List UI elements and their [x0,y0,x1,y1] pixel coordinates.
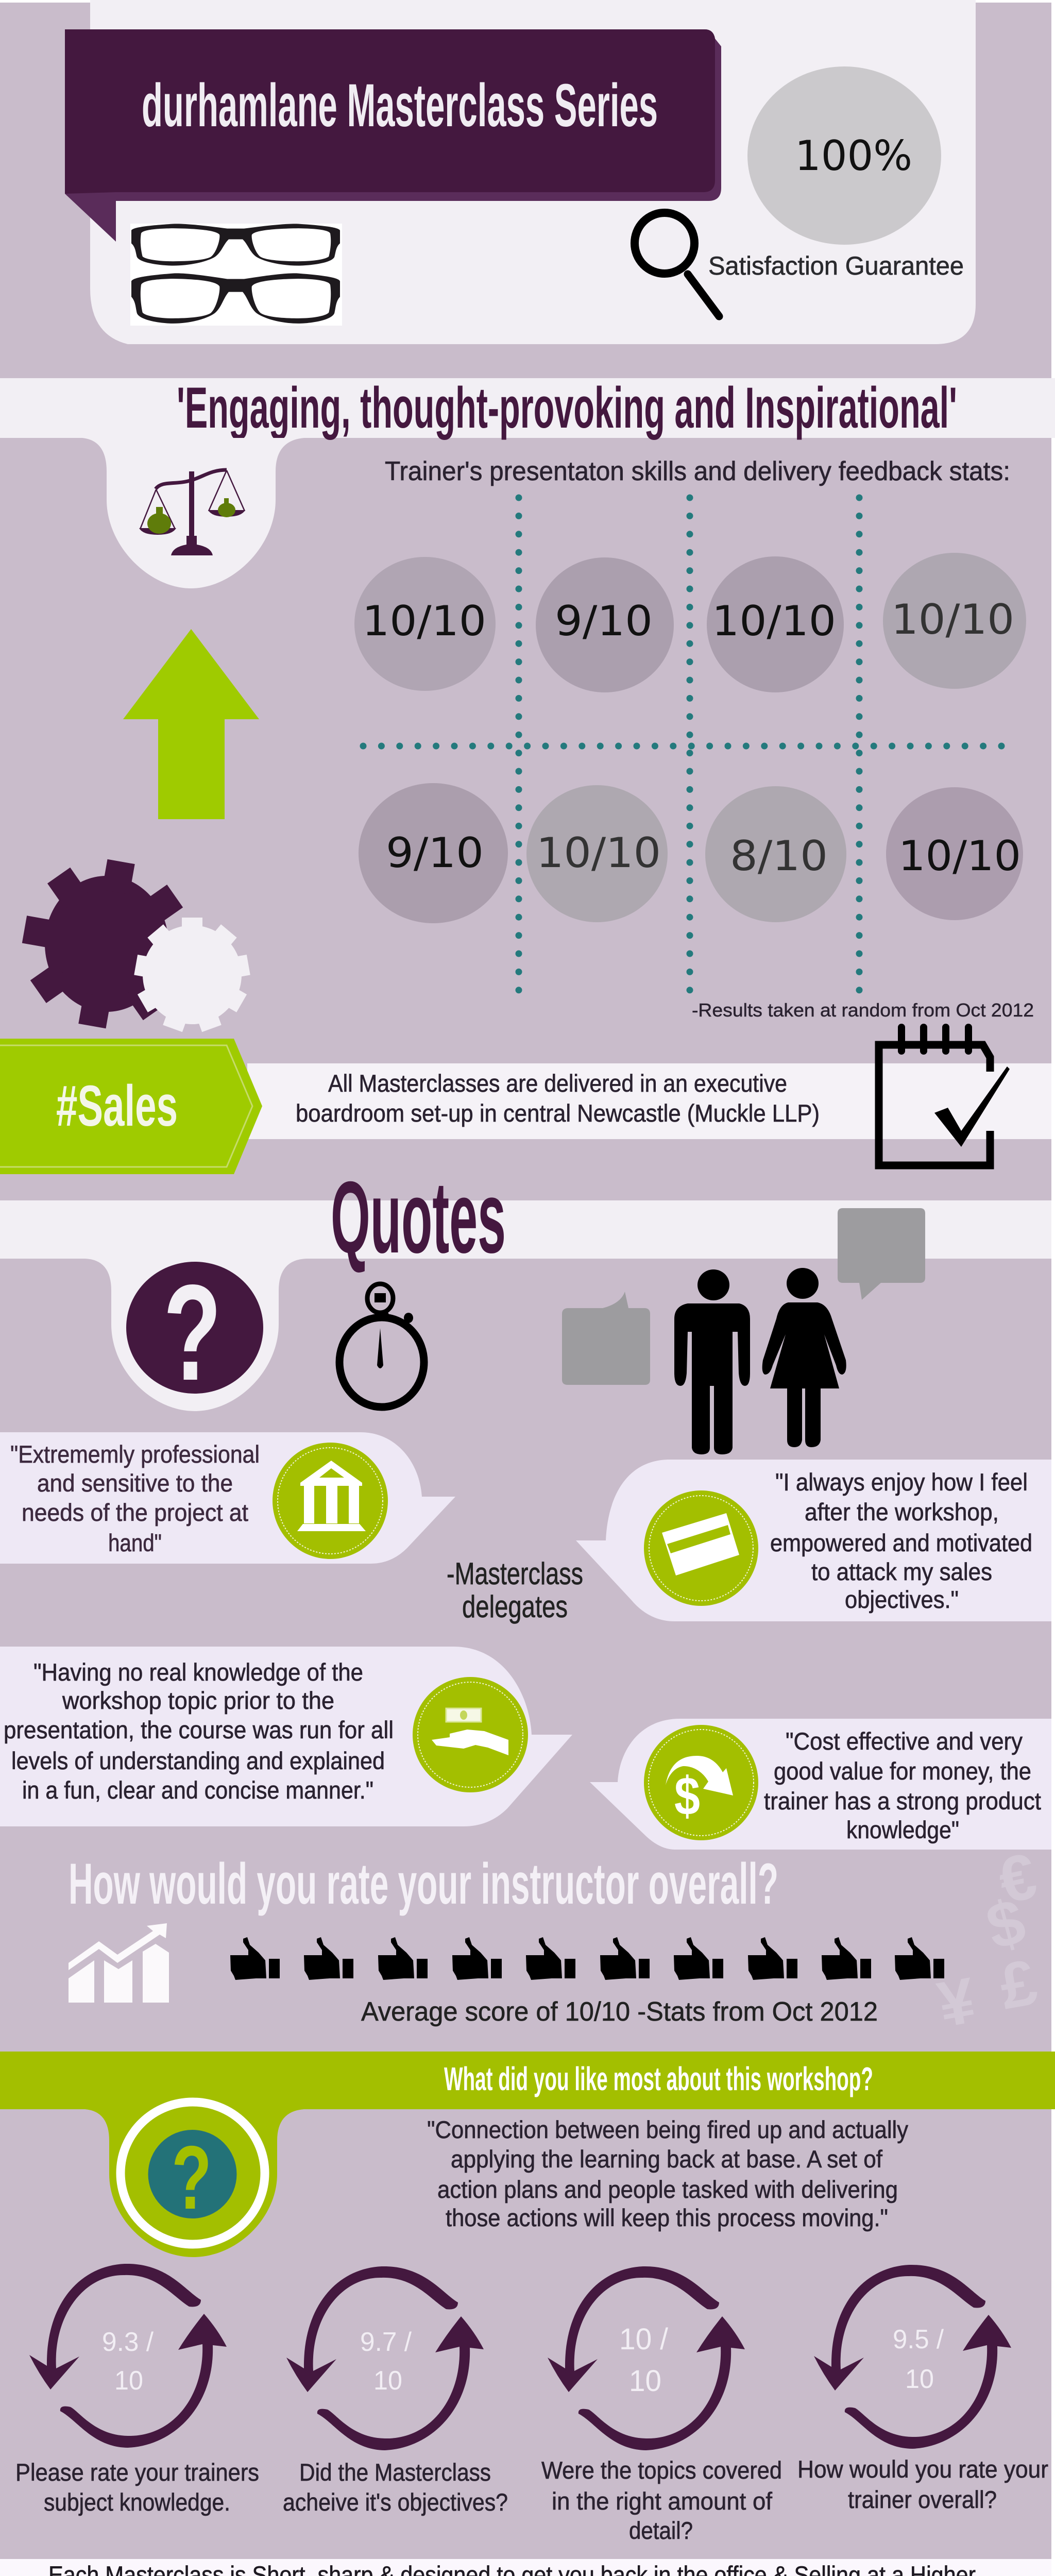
cycle score 2 [286,2266,484,2450]
currency watermark: ¥ [933,1964,980,2041]
survey question 3 [541,2456,782,2544]
quote attribution: delegates [462,1589,568,1624]
survey question 2 [283,2459,508,2516]
cycle score 4: 9.5 / [893,2325,944,2354]
quote text 3: workshop topic prior to the [62,1687,334,1714]
cycle score 1: 9.3 / [102,2327,154,2357]
quote text 2: objectives." [845,1586,959,1613]
quote text 3 [4,1658,394,1804]
icon: man [674,1269,750,1454]
icon: woman [762,1268,846,1447]
ribbon: #Sales: #Sales [56,1074,178,1138]
title: durhamlane Masterclass Series [142,72,658,140]
delivery text [296,1070,820,1127]
cycle score 3: 10 / [619,2323,669,2356]
icon: green up arrow [123,629,259,819]
cycle score 1 [29,2264,227,2448]
score 6: 10/10 [536,829,661,877]
band: delivery [247,1063,1051,1139]
score 1: 10/10 [362,597,486,645]
band: quotes: Quotes [331,1160,506,1274]
quote text 3: presentation, the course was run for all [4,1716,394,1743]
quote text 2: "I always enjoy how I feel [775,1468,1028,1496]
cycle score 4: 10 [905,2364,934,2394]
currency watermark: € [993,1840,1043,1917]
cycle score 3 [548,2266,745,2450]
score 6 [526,785,668,922]
chart: score circles [354,553,1026,923]
icon: growth chart [69,1923,169,2003]
workshop quote text: applying the learning back at base. A set of [451,2145,883,2173]
satisfaction guarantee label: Satisfaction Guarantee [708,251,964,280]
survey question 1: subject knowledge. [44,2488,230,2516]
cycle score 4 [814,2265,1011,2449]
quote text 2: after the workshop, [805,1498,999,1526]
score 4 [883,553,1026,689]
title banner [65,29,721,242]
icon: question mark: ? [163,1257,222,1409]
quote text 2 [770,1468,1032,1613]
icon: small glasses [130,224,342,326]
icon: speech bubble right [838,1208,925,1300]
currency watermark: $ [979,1885,1032,1963]
satisfaction badge: 100% [795,132,912,180]
icon: temple [273,1443,388,1559]
icon: notepad with tick [879,1027,1010,1165]
cycle score 2: 9.7 / [360,2327,412,2357]
quote bubble 3 [0,1647,572,1826]
workshop quote text: those actions will keep this process moving." [446,2204,888,2231]
band: closing statement [0,2559,1051,2576]
workshop quote text: action plans and people tasked with delivering [437,2176,898,2203]
icon: magnifying glass [635,213,719,316]
score 7 [705,786,846,922]
panel: question bubble [85,1257,307,1411]
icon: teal question mark [148,2128,237,2228]
band: engaging heading [0,376,1055,440]
panel: green question bubble [85,2102,304,2257]
survey question 3: Were the topics covered [541,2456,782,2484]
currency watermark: £ [995,1946,1042,2023]
dotted grid [363,498,1002,992]
survey question 3: in the right amount of [552,2487,773,2515]
quote text 4: good value for money, the [774,1757,1031,1785]
icon: gears [22,859,250,1032]
satisfaction badge [747,66,941,245]
quote text 1: and sensitive to the [37,1469,233,1497]
quote text 3: in a fun, clear and concise manner." [22,1776,373,1804]
quote text 3: "Having no real knowledge of the [33,1658,363,1686]
icon: speech bubble left [562,1292,650,1385]
score 8: 10/10 [898,832,1021,880]
score 3 [707,556,844,692]
score 3: 10/10 [712,597,836,645]
icon: scales [139,470,245,555]
survey question 1 [15,2459,259,2516]
quote text 4: trainer has a strong product [764,1787,1041,1815]
score 1 [354,557,496,691]
quote text 1 [10,1440,260,1556]
panel: header [65,0,976,344]
quote text 2: empowered and motivated [770,1529,1032,1556]
quote attribution [447,1556,583,1624]
quote attribution: -Masterclass [447,1556,583,1591]
quote text 1: needs of the project at [22,1499,248,1526]
icon: teal question mark: ? [172,2128,212,2228]
quote bubble 2 [576,1460,1051,1621]
quote text 1: hand" [108,1529,162,1556]
icon: hand with banknote [413,1677,528,1792]
score 2: 9/10 [555,597,653,645]
survey question 2: acheive it's objectives? [283,2488,508,2516]
icon: dollar with arrow: $ [674,1766,700,1826]
quote text 2: to attack my sales [811,1558,992,1585]
ribbon: #Sales [0,1039,262,1174]
icon: credit card [644,1490,758,1606]
cycle score 1: 10 [114,2366,143,2396]
workshop quote text: "Connection between being fired up and actually [427,2116,908,2143]
delivery text: boardroom set-up in central Newcastle (Muckle LLP) [296,1099,820,1127]
cycle score 3: 10 [629,2364,661,2398]
icon: question mark [126,1257,263,1409]
score 5: 9/10 [386,829,484,877]
score 2 [536,557,674,692]
score 4: 10/10 [891,596,1014,643]
score 8 [886,787,1023,920]
survey question 2: Did the Masterclass [299,2459,491,2486]
score 7: 8/10 [730,832,828,880]
quote text 3: levels of understanding and explained [11,1747,385,1774]
quote text 4 [764,1727,1041,1843]
survey question 3: detail? [629,2517,693,2544]
quote text 4: knowledge" [846,1816,959,1843]
icon: dollar with arrow [644,1725,758,1840]
currency watermark [933,1840,1043,2041]
rating thumbs [230,1937,944,1980]
band: quotes [0,1160,1051,1274]
quote bubble 4 [590,1719,1051,1850]
survey question 4: trainer overall? [848,2486,997,2513]
average score text: Average score of 10/10 -Stats from Oct 2012 [361,1997,878,2027]
quote bubble 1 [0,1432,455,1564]
results note: -Results taken at random from Oct 2012 [692,999,1034,1021]
delivery text: All Masterclasses are delivered in an executive [328,1070,787,1097]
score 5 [359,783,508,923]
icon: stopwatch [339,1284,424,1407]
stats intro text: Trainer's presentaton skills and delivery feedback stats: [385,456,1010,486]
workshop quote text [427,2116,908,2231]
quote text 4: "Cost effective and very [786,1727,1023,1755]
survey question 1: Please rate your trainers [15,2459,259,2486]
cycle score 2: 10 [373,2366,402,2396]
band: workshop question [0,2052,1055,2109]
quote text 1: "Extrememly professional [10,1440,260,1468]
panel: scales bubble [82,438,304,588]
survey question 4 [797,2455,1048,2513]
